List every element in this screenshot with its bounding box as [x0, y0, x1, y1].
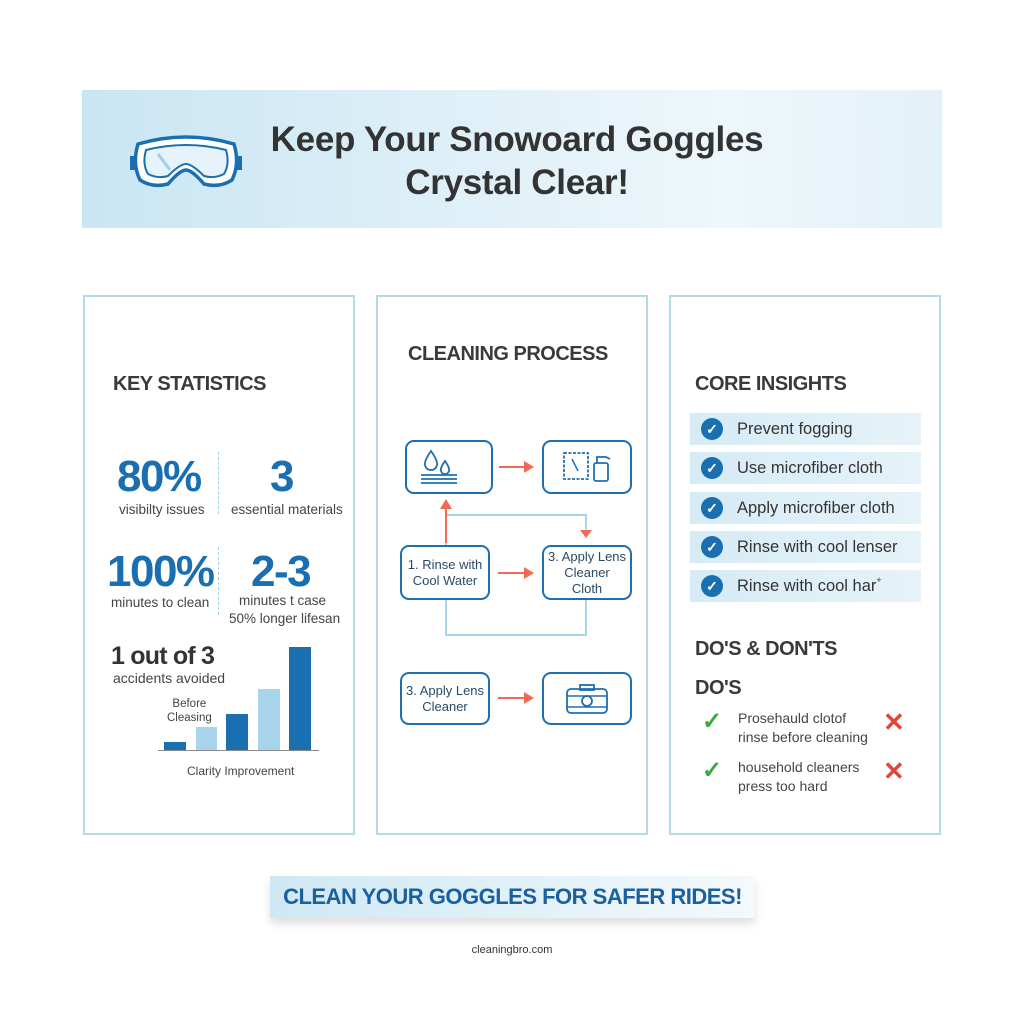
- step 3: apply lens cleaner cloth: [542, 545, 632, 600]
- heading: do's and don'ts: DO'S & DON'TS: [695, 638, 837, 660]
- bar chart: clarity improvement: Cleasing: [167, 712, 212, 724]
- do/don't item 1: rinse before cleaning: [738, 729, 868, 745]
- insight: apply microfiber cloth: ✓: [706, 500, 718, 516]
- stat: 80%: visibilty issues: [119, 502, 205, 517]
- panel: core insights: [669, 295, 941, 835]
- insight: apply microfiber cloth: Apply microfiber cloth: [737, 499, 895, 517]
- insight: apply microfiber cloth: [690, 492, 921, 524]
- stat: 3: 3: [270, 452, 293, 501]
- insight: use microfiber cloth: ✓: [706, 460, 718, 476]
- call to action banner: CLEAN YOUR GOGGLES FOR SAFER RIDES!: [283, 884, 742, 909]
- bar chart: clarity improvement: Clarity Improvement: [187, 764, 294, 778]
- step 3: apply lens cleaner cloth: Cleaner: [564, 564, 610, 580]
- stat: 3: [231, 452, 343, 517]
- subheading: do's: DO'S: [695, 677, 741, 699]
- step 1: rinse with cool water: [400, 545, 490, 600]
- call to action banner: [270, 876, 755, 918]
- stat: 2-3: 50% longer lifesan: [229, 611, 340, 626]
- heading: key statistics: KEY STATISTICS: [113, 373, 266, 395]
- bar chart: clarity improvement: Before: [172, 698, 206, 710]
- do/don't item 2: ✓: [702, 757, 722, 784]
- panel: cleaning process: [376, 295, 648, 835]
- insight: prevent fogging: Prevent fogging: [737, 420, 853, 438]
- dotted dividers: [218, 452, 219, 514]
- insight: rinse with cool lenser: ✓: [706, 539, 718, 555]
- stat: 3: essential materials: [231, 502, 343, 517]
- do/don't item 1: Prosehauld clotof: [738, 710, 846, 726]
- stat: 100%: 100%: [107, 547, 214, 596]
- do/don't item 1: [702, 707, 905, 745]
- step: water icon box: [405, 440, 493, 494]
- do/don't item 2: [702, 756, 905, 794]
- title banner: [82, 90, 942, 228]
- step 3: apply lens cleaner cloth: 3. Apply Lens: [548, 548, 626, 564]
- do/don't item 1: ✕: [883, 707, 905, 737]
- insight: prevent fogging: [690, 413, 921, 445]
- footer url: cleaningbro.com: [472, 944, 552, 956]
- step: case icon box: [542, 672, 632, 725]
- insight: rinse with cool lenser: [690, 531, 921, 563]
- step 1: rinse with cool water: Cool Water: [413, 572, 477, 588]
- stat: 80%: 80%: [117, 452, 201, 501]
- process flow connectors: [440, 461, 592, 704]
- insight: rinse with cool har: Rinse with cool har+: [737, 575, 882, 595]
- heading: core insights: CORE INSIGHTS: [695, 373, 846, 395]
- bar chart: clarity improvement: [158, 647, 319, 778]
- insight: use microfiber cloth: [690, 452, 921, 484]
- step: cloth and spray icon box: [542, 440, 632, 494]
- insight: rinse with cool har: ✓: [706, 578, 718, 594]
- title text: Crystal Clear!: [405, 163, 629, 202]
- step 1: rinse with cool water: 1. Rinse with: [408, 556, 482, 572]
- insight: rinse with cool lenser: Rinse with cool lenser: [737, 538, 898, 556]
- stat: 2-3: 2-3: [251, 547, 310, 596]
- step 3: apply lens cleaner: [400, 672, 490, 725]
- panel: key statistics: [83, 295, 355, 835]
- do/don't item 2: press too hard: [738, 778, 828, 794]
- insight: rinse with cool har: [690, 570, 921, 602]
- step 3: apply lens cleaner: 3. Apply Lens: [406, 682, 484, 698]
- insight: use microfiber cloth: Use microfiber cloth: [737, 459, 883, 477]
- step 3: apply lens cleaner cloth: Cloth: [572, 580, 602, 596]
- step 3: apply lens cleaner: Cleaner: [422, 698, 468, 714]
- title text: [271, 120, 763, 202]
- insight: prevent fogging: ✓: [706, 421, 718, 437]
- stat: 100%: minutes to clean: [111, 595, 209, 610]
- icon: goggles: [130, 135, 242, 188]
- do/don't item 1: ✓: [702, 708, 722, 735]
- heading: cleaning process: CLEANING PROCESS: [408, 343, 608, 365]
- stat: 2-3: [229, 547, 340, 626]
- stat: 1 out of 3: accidents avoided: [113, 670, 225, 686]
- stat: 1 out of 3: [111, 642, 225, 686]
- stat: 2-3: minutes t case: [239, 593, 326, 608]
- stat: 1 out of 3: 1 out of 3: [111, 642, 214, 670]
- do/don't item 2: household cleaners: [738, 759, 859, 775]
- do/don't item 2: ✕: [883, 756, 905, 786]
- title text: Keep Your Snowoard Goggles: [271, 120, 763, 159]
